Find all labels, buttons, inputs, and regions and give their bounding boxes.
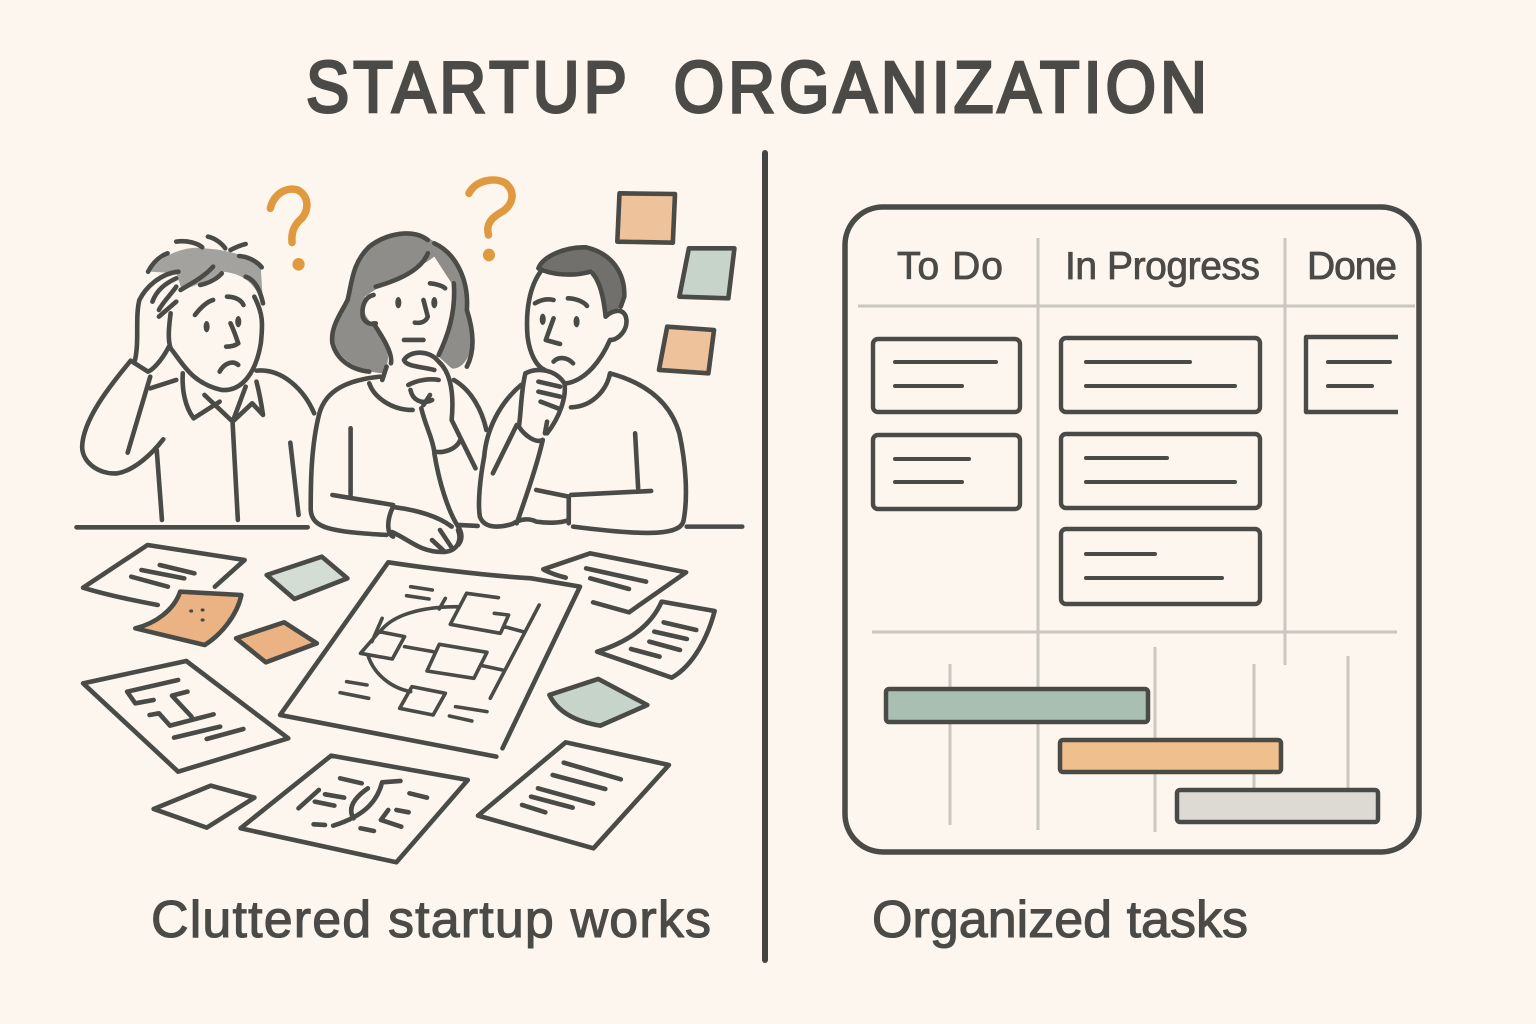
icon: lower orange sticky note	[659, 327, 714, 373]
panel: organized board	[845, 207, 1419, 852]
icon: green sticky on table	[267, 557, 347, 599]
paper: bottom right document	[478, 742, 669, 848]
caption: cluttered: Cluttered startup works	[151, 891, 711, 949]
paper: top left note	[83, 545, 245, 605]
icon: orange sticky note	[617, 193, 675, 243]
panel: cluttered startup illustration	[77, 180, 742, 862]
scattered papers on table	[83, 545, 715, 862]
task card: in progress 3	[1061, 529, 1260, 604]
icon: large green sticky	[549, 679, 647, 726]
icon: left question mark	[270, 189, 307, 271]
column heading: In Progress: In Progress	[1065, 245, 1260, 288]
person: man with hand on chin	[479, 247, 686, 533]
task card: done	[1306, 337, 1398, 412]
column heading: To Do: To Do	[897, 245, 1003, 288]
title: STARTUP ORGANIZATION	[306, 47, 1207, 128]
person: woman with hand on chin	[311, 232, 486, 545]
gantt bar: orange	[1060, 740, 1281, 772]
caption: organized: Organized tasks	[872, 891, 1248, 949]
board frame	[845, 207, 1419, 852]
paper: top right note	[543, 553, 686, 612]
task card: in progress 1	[1061, 338, 1260, 412]
icon: right question mark	[469, 180, 512, 261]
table edge	[77, 524, 742, 530]
paper: bottom centre sketch	[241, 756, 468, 862]
task card: in progress 2	[1061, 434, 1260, 508]
task card: to do 2	[873, 435, 1020, 509]
task card: to do 1	[873, 339, 1020, 412]
person: stressed man scratching head	[82, 237, 314, 520]
people and wall notes	[77, 193, 742, 545]
gantt bar: grey	[1177, 790, 1378, 822]
hand resting on table	[392, 530, 459, 552]
board grid lines	[858, 238, 1415, 832]
gantt bar: green	[886, 689, 1148, 722]
paper: large flowchart sheet	[280, 562, 580, 757]
column heading: Done: Done	[1307, 245, 1397, 288]
paper: curled right note	[597, 602, 715, 678]
icon: orange sticky on table	[236, 622, 317, 662]
paper: left diagram sheet	[83, 661, 288, 772]
icon: curled orange sticky	[135, 592, 241, 645]
center divider	[762, 153, 768, 960]
paper: small blank sheet	[154, 786, 254, 828]
icon: green sticky note	[679, 248, 734, 298]
